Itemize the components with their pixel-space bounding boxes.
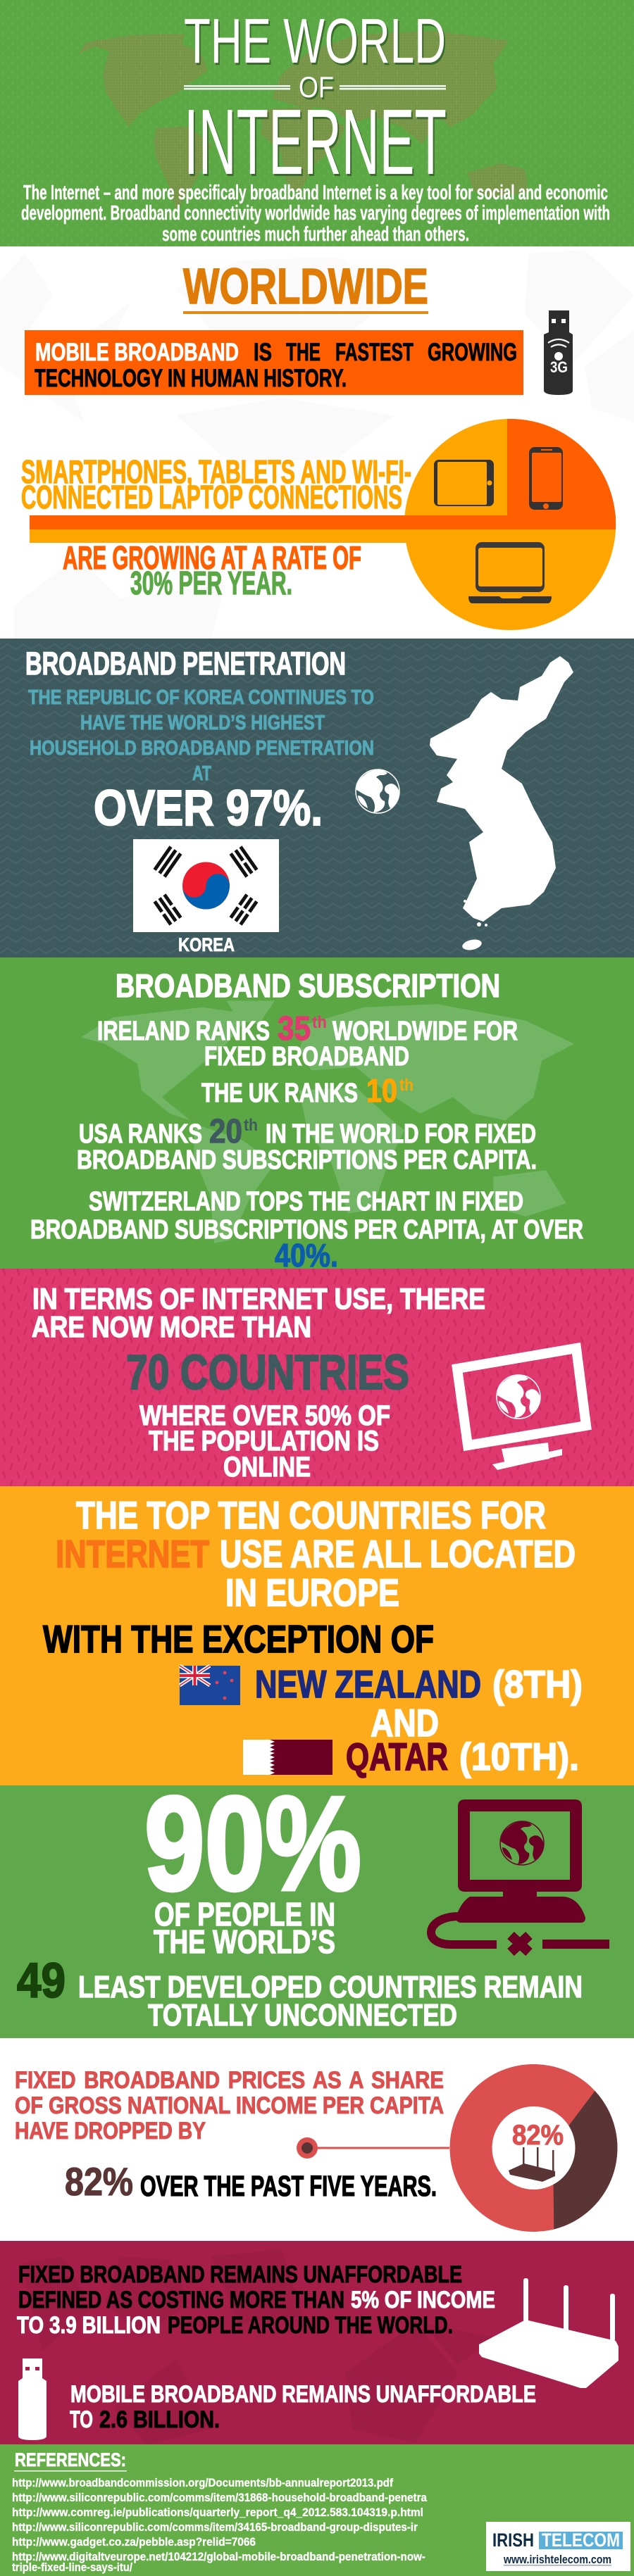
- text: uk rank: THE UK RANKS: [201, 1079, 358, 1108]
- text: of people: OF PEOPLE IN: [154, 1896, 335, 1933]
- intro paragraph: [21, 182, 610, 246]
- panel: fixed broadband prices: [0, 2038, 634, 2241]
- text: korea household: THE REPUBLIC OF KOREA CONTINUES TO: [28, 686, 374, 709]
- panel: internet use: [0, 1269, 634, 1486]
- list: reference urls: http://www.siliconrepublic.com/comms/item/34165-broadband-group-disputes-ir: [12, 2521, 418, 2534]
- text: internet use intro: ARE NOW MORE THAN: [32, 1310, 311, 1343]
- text: ireland rank: FIXED BROADBAND: [204, 1042, 409, 1072]
- text: fixed broadband unaffordable: FIXED BROADBAND REMAINS UNAFFORDABLE: [18, 2261, 462, 2288]
- stat: 49: 49: [17, 1953, 66, 2008]
- list: reference urls: http://www.comreg.ie/publications/quarterly_report_q4_2012.583.104319.p.html: [12, 2506, 423, 2519]
- title: THE WORLD: OF: [299, 70, 334, 103]
- stat: 82% over five years: [65, 2159, 437, 2204]
- callout: mobile broadband: IS: [254, 339, 272, 366]
- text: fixed broadband prices: FIXED BROADBAND PRICES AS A SHARE: [15, 2067, 444, 2094]
- icon: laptop: [468, 542, 552, 603]
- text: fixed broadband prices: HAVE DROPPED BY: [15, 2118, 206, 2144]
- panel: broadband penetration: [0, 639, 634, 957]
- stat: 82% over five years: 82%: [65, 2159, 133, 2204]
- icon: globe: [356, 769, 399, 813]
- text: fixed broadband unaffordable: 5% OF INCOME: [351, 2287, 495, 2313]
- stat: 70 countries: 70 COUNTRIES: [126, 1345, 409, 1400]
- text: with the exception of: WITH THE EXCEPTION OF: [43, 1617, 434, 1661]
- text: over 50 percent online: WHERE OVER 50% OF: [139, 1400, 390, 1431]
- text: of people: [154, 1896, 335, 1960]
- text: mobile broadband unaffordable: MOBILE BROADBAND REMAINS UNAFFORDABLE: [70, 2381, 536, 2408]
- heading: WORLDWIDE: WORLDWIDE: [183, 259, 428, 315]
- text: fixed broadband prices: [15, 2067, 444, 2144]
- text: over 50 percent online: ONLINE: [223, 1452, 311, 1483]
- callout: mobile broadband: FASTEST: [335, 339, 414, 366]
- text: smartphones tablets: [21, 453, 411, 515]
- text: growth rate: [63, 539, 361, 601]
- text: qatar: [346, 1735, 579, 1778]
- chart: 82 percent donut: [449, 2064, 617, 2232]
- stat: over 97%: OVER 97%.: [94, 781, 323, 836]
- text: uk rank: 10: [366, 1072, 397, 1109]
- text: internet use intro: [32, 1282, 485, 1343]
- list: reference urls: http://www.digitaltveurope.net/104212/global-mobile-broadband-penetration-now-: [12, 2551, 425, 2563]
- callout: mobile broadband: MOBILE BROADBAND: [35, 339, 239, 366]
- icon: new zealand flag: [180, 1666, 240, 1705]
- icon: 3G usb stick: 3G: [550, 358, 568, 376]
- text: growth rate: 30% PER YEAR.: [130, 565, 292, 601]
- panel: header: [0, 0, 634, 246]
- title: THE WORLD: [184, 6, 447, 194]
- text: internet use intro: IN TERMS OF INTERNET USE, THERE: [32, 1282, 485, 1315]
- graphic: devices circle: [30, 419, 616, 630]
- text: fixed broadband unaffordable: PEOPLE AROUND THE WORLD.: [168, 2312, 453, 2339]
- list: reference urls: triple-fixed-line-says-itu/: [12, 2561, 132, 2574]
- intro paragraph: some countries much further ahead than others.: [162, 223, 469, 246]
- label: 82%: 82%: [512, 2120, 564, 2151]
- list: reference urls: [12, 2477, 428, 2574]
- logo: irish telecom: [486, 2522, 630, 2571]
- panel: 90 percent unconnected: [0, 1769, 634, 2038]
- panel: worldwide: [0, 246, 634, 639]
- text: ireland rank: IRELAND RANKS: [97, 1017, 270, 1046]
- text: top ten: IN EUROPE: [225, 1571, 399, 1614]
- list: reference urls: http://www.gadget.co.za/pebble.asp?relid=7066: [12, 2536, 256, 2549]
- text: usa rank: th: [244, 1116, 258, 1135]
- callout: mobile broadband: TECHNOLOGY IN HUMAN HISTORY.: [35, 365, 347, 392]
- panel: references: [0, 2444, 634, 2576]
- text: fixed broadband unaffordable: TO 3.9 BILLION: [17, 2312, 161, 2339]
- text: usa rank: IN THE WORLD FOR FIXED: [266, 1119, 536, 1149]
- text: ireland rank: th: [312, 1013, 327, 1032]
- text: usa rank: 20: [209, 1113, 242, 1150]
- logo: irish telecom: www.irishtelecom.com: [503, 2553, 611, 2566]
- text: fixed broadband unaffordable: [17, 2261, 495, 2339]
- callout: mobile broadband: THE: [286, 339, 321, 366]
- text: least developed: [78, 1970, 583, 2032]
- map: korean peninsula: [430, 656, 573, 952]
- connector dot and line: [297, 2137, 449, 2159]
- heading: broadband subscription: BROADBAND SUBSCRIPTION: [116, 967, 500, 1004]
- icon: phone: [529, 447, 563, 510]
- panel: unaffordable: [0, 2241, 634, 2445]
- panel: broadband subscription: [0, 957, 634, 1274]
- icon: korea flag: [133, 839, 279, 932]
- label: KOREA: KOREA: [178, 934, 235, 955]
- icon: usb stick: [18, 2358, 46, 2440]
- icon: monitor with globe: [457, 1348, 586, 1470]
- text: mobile broadband unaffordable: [70, 2381, 536, 2433]
- callout: mobile broadband: [25, 330, 523, 395]
- heading: references: REFERENCES:: [15, 2449, 126, 2470]
- icon: disconnected computer: [431, 1799, 609, 1952]
- text: mobile broadband unaffordable: 2.6 BILLION.: [99, 2406, 220, 2433]
- text: over 50 percent online: THE POPULATION IS: [149, 1426, 379, 1457]
- text: qatar: QATAR: [346, 1735, 448, 1778]
- text: korea household: AT: [192, 762, 211, 785]
- text: korea household: [28, 686, 374, 785]
- text: usa rank: [77, 1113, 537, 1175]
- text: of people: THE WORLD’S: [154, 1923, 335, 1960]
- text: ireland rank: [97, 1010, 518, 1072]
- text: mobile broadband unaffordable: TO: [70, 2406, 93, 2433]
- icon: 3G usb stick: [544, 310, 573, 395]
- text: switzerland: 40%.: [275, 1237, 338, 1274]
- text: fixed broadband unaffordable: DEFINED AS COSTING MORE THAN: [18, 2287, 344, 2313]
- text: qatar: (10TH).: [459, 1735, 579, 1778]
- text: switzerland: [30, 1187, 583, 1274]
- text: ireland rank: 35: [278, 1010, 311, 1048]
- text: new zealand: (8TH): [492, 1662, 583, 1706]
- icon: router: [479, 2278, 619, 2388]
- icon: small router: [509, 2147, 555, 2182]
- text: fixed broadband prices: OF GROSS NATIONAL INCOME PER CAPITA: [15, 2092, 444, 2119]
- list: reference urls: http://www.broadbandcommission.org/Documents/bb-annualreport2013.pdf: [12, 2477, 393, 2489]
- text: top ten: INTERNET: [56, 1532, 209, 1576]
- list: reference urls: http://www.siliconrepublic.com/comms/item/31868-household-broadband-penetra: [12, 2492, 428, 2504]
- text: smartphones tablets: CONNECTED LAPTOP CONNECTIONS: [21, 479, 402, 515]
- text: smartphones tablets: SMARTPHONES, TABLETS AND WI-FI-: [21, 453, 411, 490]
- text: least developed: TOTALLY UNCONNECTED: [148, 1998, 457, 2032]
- text: korea household: HOUSEHOLD BROADBAND PENETRATION: [30, 737, 374, 760]
- stat: 82% over five years: OVER THE PAST FIVE YEARS.: [140, 2170, 437, 2202]
- logo: irish telecom: IRISH: [492, 2530, 534, 2551]
- text: switzerland: SWITZERLAND TOPS THE CHART IN FIXED: [89, 1187, 523, 1217]
- text: new zealand: NEW ZEALAND: [255, 1662, 481, 1706]
- icon: qatar flag: [243, 1740, 332, 1775]
- text: ireland rank: WORLDWIDE FOR: [332, 1017, 518, 1046]
- title rules: [184, 85, 446, 89]
- text: top ten: [56, 1493, 576, 1614]
- map: world silhouette: [81, 1000, 574, 1243]
- callout: mobile broadband: GROWING: [428, 339, 517, 366]
- text: usa rank: USA RANKS: [79, 1119, 202, 1149]
- icon: tablet: [434, 460, 494, 506]
- text: uk rank: th: [399, 1076, 414, 1095]
- title: THE WORLD: THE WORLD: [184, 6, 446, 77]
- panel: top ten countries: [0, 1486, 634, 1785]
- text: korea household: HAVE THE WORLD’S HIGHEST: [80, 712, 325, 734]
- heading: broadband penetration: BROADBAND PENETRATION: [25, 646, 346, 681]
- text: over 50 percent online: [139, 1400, 390, 1483]
- text: and: AND: [371, 1701, 439, 1745]
- logo: irish telecom: TELECOM: [542, 2530, 620, 2551]
- stat: 90%: 90%: [144, 1769, 361, 1918]
- text: growth rate: ARE GROWING AT A RATE OF: [63, 539, 361, 576]
- dotted world map: [79, 31, 528, 211]
